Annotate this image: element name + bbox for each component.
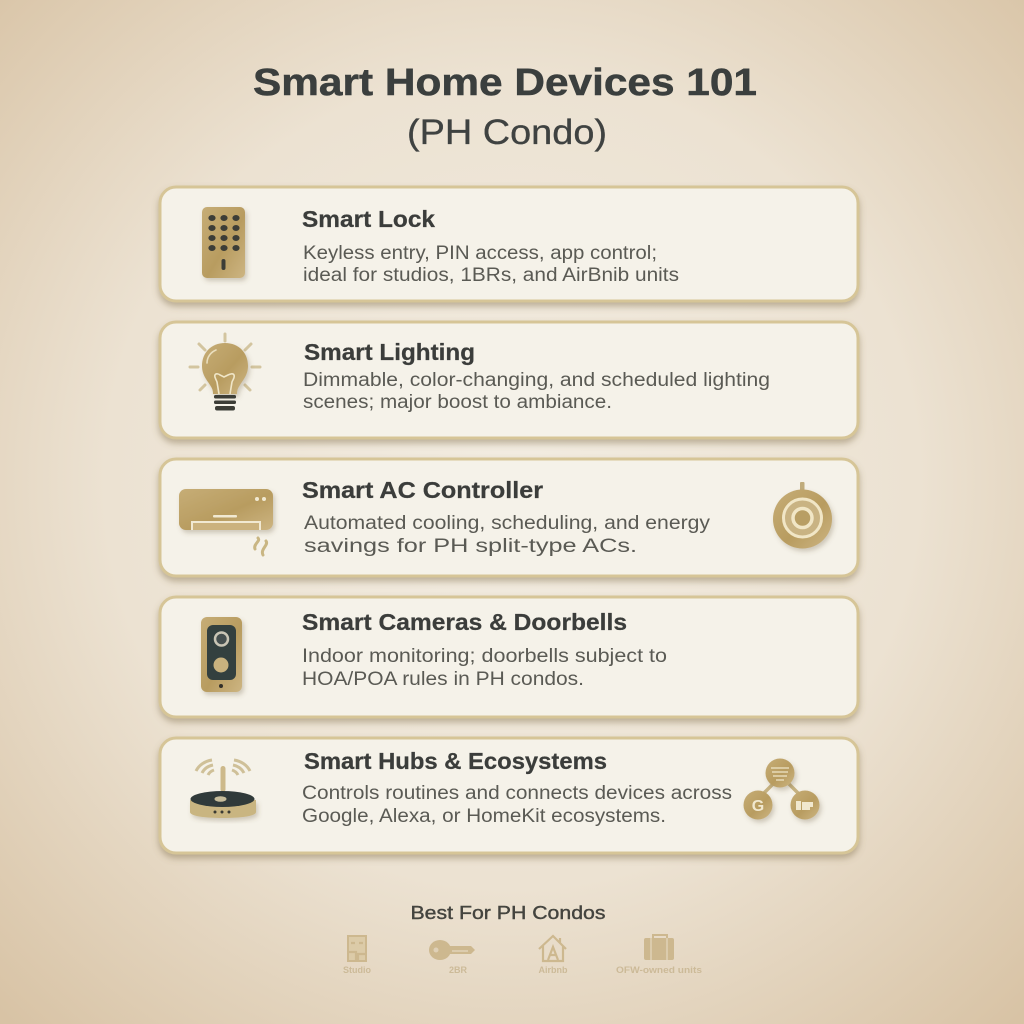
description: smart hubs and ecosystems xyxy=(302,783,732,827)
description: smart cameras and doorbells: Indoor monitoring; doorbells subject to xyxy=(302,646,667,667)
panel: smart lighting xyxy=(160,322,858,438)
label: studio: Studio xyxy=(343,965,371,975)
subtitle: (PH Condo) xyxy=(407,113,607,152)
heading: smart lighting: Smart Lighting xyxy=(304,339,475,365)
icon: video doorbell xyxy=(201,617,242,692)
icon: round thermostat controller xyxy=(773,482,832,548)
label: airbnb: Airbnb xyxy=(538,965,568,975)
panel: smart lock xyxy=(160,187,858,301)
title xyxy=(253,62,757,152)
label: ofw-owned units: OFW-owned units xyxy=(616,965,702,975)
description: smart lighting: Dimmable, color-changing, and scheduled lighting xyxy=(303,370,770,391)
heading: smart ac controller: Smart AC Controller xyxy=(302,477,543,503)
icon: light bulb xyxy=(190,334,260,410)
footer: best for ph condos xyxy=(343,902,702,975)
description: smart lock: Keyless entry, PIN access, app control; xyxy=(303,243,657,264)
label: 2br: 2BR xyxy=(449,965,467,975)
icon: ecosystem network: G xyxy=(752,798,764,815)
description: smart hubs and ecosystems: Controls routines and connects devices across xyxy=(302,783,732,804)
panel: smart hubs and ecosystems xyxy=(160,738,858,853)
heading: smart lock: Smart Lock xyxy=(302,206,436,232)
icon: ecosystem network xyxy=(744,758,820,820)
description: smart ac controller: savings for PH split-type ACs. xyxy=(304,536,637,557)
panel: smart cameras and doorbells xyxy=(160,597,858,717)
description: smart lock: ideal for studios, 1BRs, and AirBnib units xyxy=(303,265,679,286)
icon: smart hub with wifi xyxy=(190,760,256,818)
description: smart lighting xyxy=(303,370,770,413)
icon: keypad lock xyxy=(202,207,245,278)
panel: smart ac controller xyxy=(160,459,858,576)
footer heading: Best For PH Condos xyxy=(410,902,606,923)
icon: key xyxy=(429,940,475,960)
description: smart lighting: scenes; major boost to ambiance. xyxy=(303,392,612,413)
heading: smart hubs and ecosystems: Smart Hubs & Ecosystems xyxy=(304,748,607,774)
title: Smart Home Devices 101 xyxy=(253,62,757,104)
icon: airbnb house xyxy=(539,936,566,961)
description: smart ac controller: Automated cooling, scheduling, and energy xyxy=(304,513,711,534)
icon: split-type air conditioner xyxy=(179,489,273,555)
icon: studio xyxy=(348,936,366,961)
description: smart lock xyxy=(303,243,679,286)
description: smart cameras and doorbells xyxy=(302,646,667,690)
description: smart hubs and ecosystems: Google, Alexa, or HomeKit ecosystems. xyxy=(302,806,666,827)
description: smart cameras and doorbells: HOA/POA rules in PH condos. xyxy=(302,669,584,690)
icon: suitcase xyxy=(644,935,674,960)
heading: smart cameras and doorbells: Smart Cameras & Doorbells xyxy=(302,609,627,635)
description: smart ac controller xyxy=(304,513,711,557)
